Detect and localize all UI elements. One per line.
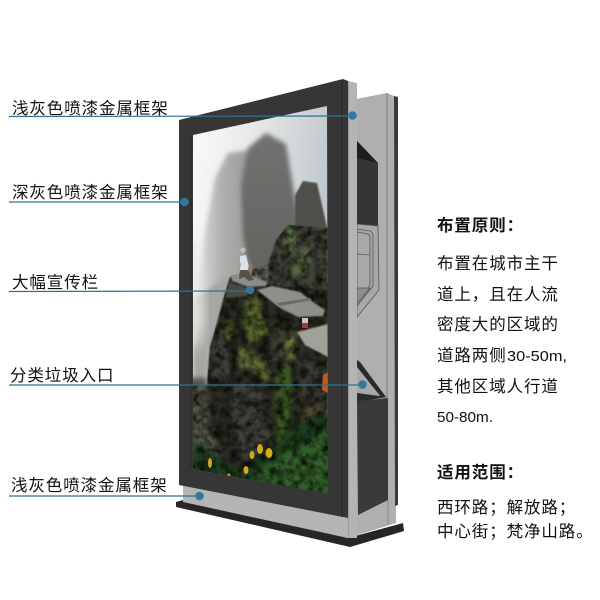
text block: layout principles: 布置在城市主干 xyxy=(437,254,559,273)
label: light grey frame bottom: 浅灰色喷漆金属框架 xyxy=(11,476,168,495)
lower side door xyxy=(357,398,388,515)
text block: applicable area: 中心街；梵净山路。 xyxy=(437,522,594,541)
vegetation foreground xyxy=(193,410,328,498)
yellow flowers xyxy=(208,444,272,476)
right rock xyxy=(295,181,328,250)
side body panel xyxy=(348,93,398,538)
kiosk illustration xyxy=(176,79,404,547)
dark frame xyxy=(179,79,348,518)
cliff xyxy=(190,277,328,500)
rock slabs xyxy=(257,286,325,317)
sky xyxy=(190,100,330,500)
heading: layout principles: 布置原则： xyxy=(437,216,524,235)
upper side recess xyxy=(357,141,378,226)
label: promotional panel xyxy=(9,273,254,294)
label: light grey frame top xyxy=(9,99,357,120)
text block: layout principles: 道上，且在人流 xyxy=(437,285,559,304)
text block: layout principles: 密度大的区域的 xyxy=(437,315,559,334)
label: promotional panel: 大幅宣传栏 xyxy=(12,273,99,292)
waste inlet opening xyxy=(357,360,387,402)
label: light grey frame bottom xyxy=(9,476,204,500)
moss xyxy=(244,296,268,345)
light strip frame side xyxy=(348,81,357,538)
text block: layout principles: 30-50m, xyxy=(507,348,567,365)
rock faces xyxy=(232,380,272,462)
lower-left grey-green bank xyxy=(193,374,223,466)
light grey bottom frame xyxy=(183,485,348,538)
lower-left mist xyxy=(193,279,226,384)
orange and red accents xyxy=(322,372,328,393)
label: dark grey frame xyxy=(9,183,189,206)
label: dark grey frame: 深灰色喷漆金属框架 xyxy=(12,183,169,202)
text block: layout principles: 50-80m. xyxy=(437,409,493,426)
person on rock xyxy=(237,247,254,281)
text block: layout principles: 其他区域人行道 xyxy=(437,377,559,396)
label: light grey frame top: 浅灰色喷漆金属框架 xyxy=(12,99,169,118)
text block: layout principles xyxy=(437,254,567,426)
base plinth xyxy=(176,500,404,547)
far misty peak xyxy=(199,148,258,378)
label: waste inlet xyxy=(9,366,367,389)
text block: layout principles: 道路两侧 xyxy=(437,346,507,365)
rock and foliage texture xyxy=(190,225,330,502)
right dark mass with greenery xyxy=(268,225,328,330)
heading: applicable area: 适用范围： xyxy=(437,463,524,482)
side control panel xyxy=(357,224,379,317)
promotional screen photo xyxy=(188,100,330,502)
text block: applicable area xyxy=(437,498,594,541)
label: waste inlet: 分类垃圾入口 xyxy=(10,366,114,385)
main peak xyxy=(241,133,300,300)
text block: applicable area: 西环路；解放路； xyxy=(437,498,576,517)
